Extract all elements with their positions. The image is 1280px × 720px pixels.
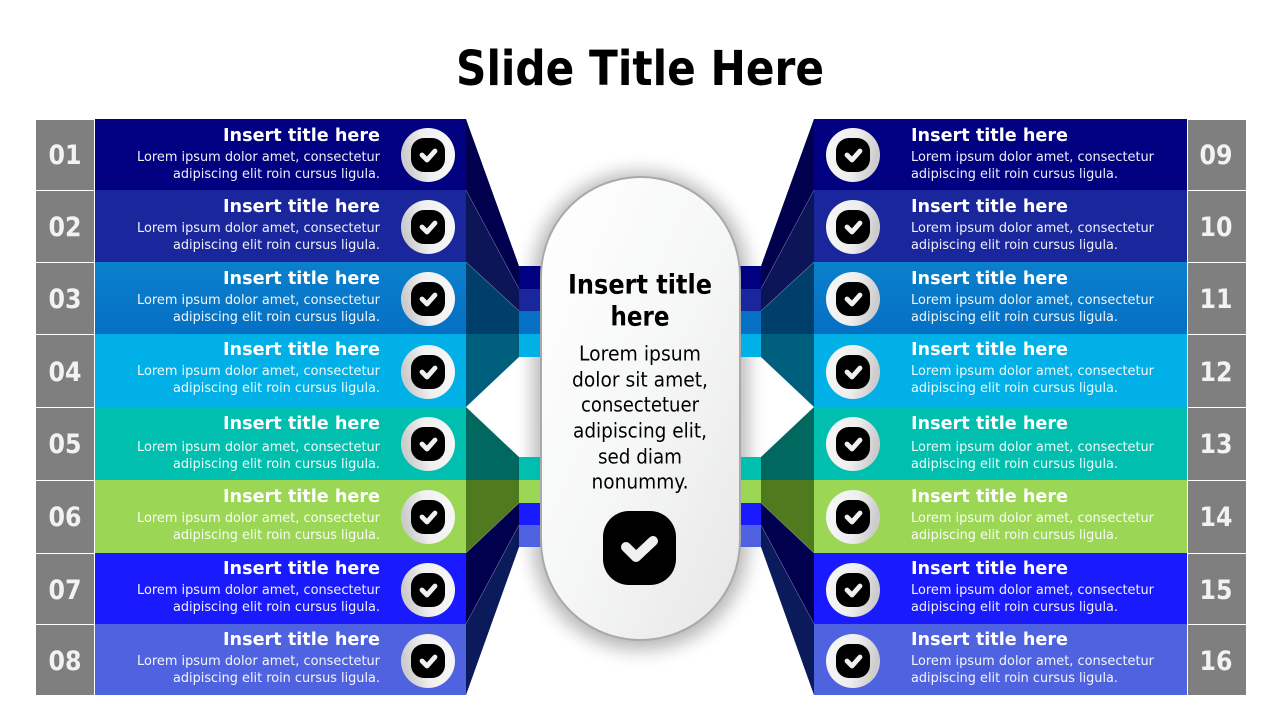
- centre body text: adipiscing elit,: [573, 418, 707, 442]
- panel: right number column: 15: [1200, 575, 1232, 606]
- panel: left number column: 08: [48, 646, 82, 677]
- panel: right number column: 16: [1200, 646, 1232, 677]
- right row text: adipiscing elit roin cursus ligula.: [911, 237, 1118, 253]
- left row text: Insert title here: [223, 486, 380, 507]
- right row text: adipiscing elit roin cursus ligula.: [911, 456, 1118, 472]
- right row text: Insert title here: [911, 629, 1068, 650]
- centre title: Insert title: [568, 270, 712, 300]
- panel: right colour bars: [814, 119, 1187, 695]
- centre title second line: here: [610, 302, 670, 332]
- right row text: Insert title here: [911, 268, 1068, 289]
- left row text: Insert title here: [223, 268, 380, 289]
- right row text: Lorem ipsum dolor amet, consectetur: [911, 582, 1154, 598]
- left row text: Lorem ipsum dolor amet, consectetur: [137, 439, 380, 455]
- left row text: adipiscing elit roin cursus ligula.: [173, 237, 380, 253]
- right row text: Insert title here: [911, 486, 1068, 507]
- panel: right number column: 11: [1200, 284, 1232, 315]
- right row text: Insert title here: [911, 558, 1068, 579]
- panel: right number column: 13: [1200, 429, 1232, 460]
- right row text: Lorem ipsum dolor amet, consectetur: [911, 292, 1154, 308]
- left row text: Lorem ipsum dolor amet, consectetur: [137, 510, 380, 526]
- icon: large check badge: [603, 511, 676, 585]
- left row text: Insert title here: [223, 558, 380, 579]
- centre body text: nonummy.: [592, 470, 688, 494]
- left row text: Lorem ipsum dolor amet, consectetur: [137, 363, 380, 379]
- icons: right check badges: [826, 128, 880, 688]
- centre body text: dolor sit amet,: [572, 368, 708, 392]
- right row text: adipiscing elit roin cursus ligula.: [911, 309, 1118, 325]
- left row text: adipiscing elit roin cursus ligula.: [173, 599, 380, 615]
- title: Slide Title Here: [456, 41, 824, 97]
- centre body text: [572, 342, 708, 494]
- panel: right number column: 09: [1200, 140, 1232, 171]
- panel: right number column: [1188, 120, 1246, 695]
- right row text: Insert title here: [911, 196, 1068, 217]
- panel: left number column: 07: [48, 575, 82, 606]
- left row text: Insert title here: [223, 125, 380, 146]
- right row text: adipiscing elit roin cursus ligula.: [911, 527, 1118, 543]
- centre body text: sed diam: [598, 444, 682, 468]
- centre body text: consectetuer: [581, 392, 700, 416]
- panel: right number column: 14: [1200, 502, 1232, 533]
- right row text: adipiscing elit roin cursus ligula.: [911, 166, 1118, 182]
- left row text: Lorem ipsum dolor amet, consectetur: [137, 653, 380, 669]
- left row text: Insert title here: [223, 339, 380, 360]
- left row text: Insert title here: [223, 413, 380, 434]
- left row text: adipiscing elit roin cursus ligula.: [173, 527, 380, 543]
- right row text: Lorem ipsum dolor amet, consectetur: [911, 149, 1154, 165]
- icons: left check badges: [401, 128, 455, 688]
- panel: left number column: 06: [48, 502, 82, 533]
- right row text: adipiscing elit roin cursus ligula.: [911, 599, 1118, 615]
- right row text: adipiscing elit roin cursus ligula.: [911, 380, 1118, 396]
- right connector folds: [761, 119, 814, 695]
- right row text: Lorem ipsum dolor amet, consectetur: [911, 653, 1154, 669]
- right row text: adipiscing elit roin cursus ligula.: [911, 670, 1118, 686]
- panel: left number column: 04: [48, 357, 82, 388]
- left row text: adipiscing elit roin cursus ligula.: [173, 380, 380, 396]
- centre capsule: [541, 177, 740, 640]
- left connector folds: [466, 119, 519, 695]
- left row text: Lorem ipsum dolor amet, consectetur: [137, 149, 380, 165]
- centre body text: Lorem ipsum: [579, 342, 701, 366]
- right row text: [911, 125, 1154, 686]
- panel: right number column: 12: [1200, 357, 1232, 388]
- panel: left number column: 03: [48, 284, 82, 315]
- right row text: Insert title here: [911, 413, 1068, 434]
- panel: left number column: [36, 120, 94, 695]
- capsule shadow: [533, 172, 748, 650]
- right row text: Insert title here: [911, 339, 1068, 360]
- left row text: Lorem ipsum dolor amet, consectetur: [137, 582, 380, 598]
- left row text: adipiscing elit roin cursus ligula.: [173, 166, 380, 182]
- left row text: Lorem ipsum dolor amet, consectetur: [137, 292, 380, 308]
- left row text: Insert title here: [223, 629, 380, 650]
- inner colour strips: [519, 266, 761, 547]
- left row text: Lorem ipsum dolor amet, consectetur: [137, 220, 380, 236]
- right row text: Lorem ipsum dolor amet, consectetur: [911, 439, 1154, 455]
- left row text: [137, 125, 380, 686]
- left row text: adipiscing elit roin cursus ligula.: [173, 456, 380, 472]
- right row text: Lorem ipsum dolor amet, consectetur: [911, 363, 1154, 379]
- left row text: adipiscing elit roin cursus ligula.: [173, 309, 380, 325]
- panel: left number column: 01: [48, 140, 82, 171]
- panel: left number column: 05: [48, 429, 82, 460]
- left row text: Insert title here: [223, 196, 380, 217]
- right row text: Insert title here: [911, 125, 1068, 146]
- panel: left number column: 02: [48, 212, 82, 243]
- panel: left colour bars: [95, 119, 466, 695]
- right row text: Lorem ipsum dolor amet, consectetur: [911, 220, 1154, 236]
- left row text: adipiscing elit roin cursus ligula.: [173, 670, 380, 686]
- panel: right number column: 10: [1200, 212, 1232, 243]
- right row text: Lorem ipsum dolor amet, consectetur: [911, 510, 1154, 526]
